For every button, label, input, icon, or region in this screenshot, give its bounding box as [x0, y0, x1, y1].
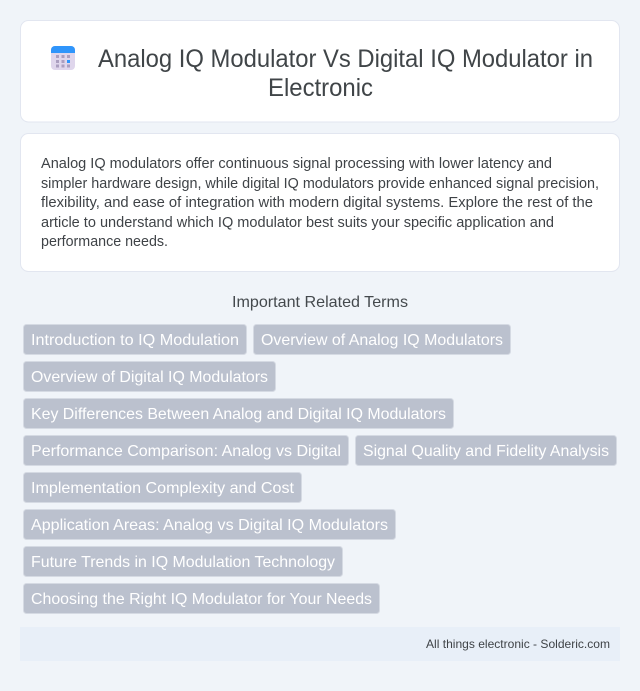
tag	[24, 510, 396, 540]
tag: Overview of Digital IQ Modulators	[31, 369, 268, 386]
tag: Choosing the Right IQ Modulator for Your Needs	[31, 591, 372, 608]
tag: Performance Comparison: Analog vs Digital	[31, 443, 341, 460]
tag	[24, 362, 276, 392]
title: Electronic	[268, 74, 373, 102]
tag	[24, 398, 454, 428]
panel: title card	[20, 20, 620, 122]
tag: Implementation Complexity and Cost	[31, 480, 295, 497]
tag	[24, 324, 246, 354]
tag: Future Trends in IQ Modulation Technology	[31, 554, 335, 571]
tag	[254, 324, 510, 354]
panel: summary: simpler hardware design, while digital IQ modulators provide enhanced signal precision,	[41, 176, 599, 192]
tag: Introduction to IQ Modulation	[31, 332, 239, 349]
panel: summary	[20, 134, 620, 272]
tag	[24, 546, 342, 576]
footer: All things electronic - Solderic.com	[426, 637, 610, 651]
panel: summary: performance needs.	[41, 234, 168, 250]
panel: summary: flexibility, and ease of integration with modern digital systems. Explore the rest of the	[41, 195, 593, 211]
panel: summary: article to understand which IQ modulator best suits your specific application and	[41, 215, 554, 231]
heading: related terms: Important Related Terms	[232, 294, 408, 311]
tag: Signal Quality and Fidelity Analysis	[363, 443, 609, 460]
tag	[24, 472, 302, 502]
tag	[356, 436, 616, 466]
tag: Application Areas: Analog vs Digital IQ Modulators	[31, 517, 388, 534]
tag	[24, 584, 380, 614]
footer	[20, 627, 620, 661]
title	[98, 45, 593, 102]
icon: calendar	[51, 46, 75, 70]
tag: Key Differences Between Analog and Digital IQ Modulators	[31, 406, 446, 423]
tag: Overview of Analog IQ Modulators	[261, 332, 503, 349]
panel: summary: Analog IQ modulators offer continuous signal processing with lower latency and	[41, 156, 552, 172]
tag list	[24, 324, 616, 614]
tag	[24, 436, 348, 466]
title: Analog IQ Modulator Vs Digital IQ Modulator in	[98, 45, 593, 73]
